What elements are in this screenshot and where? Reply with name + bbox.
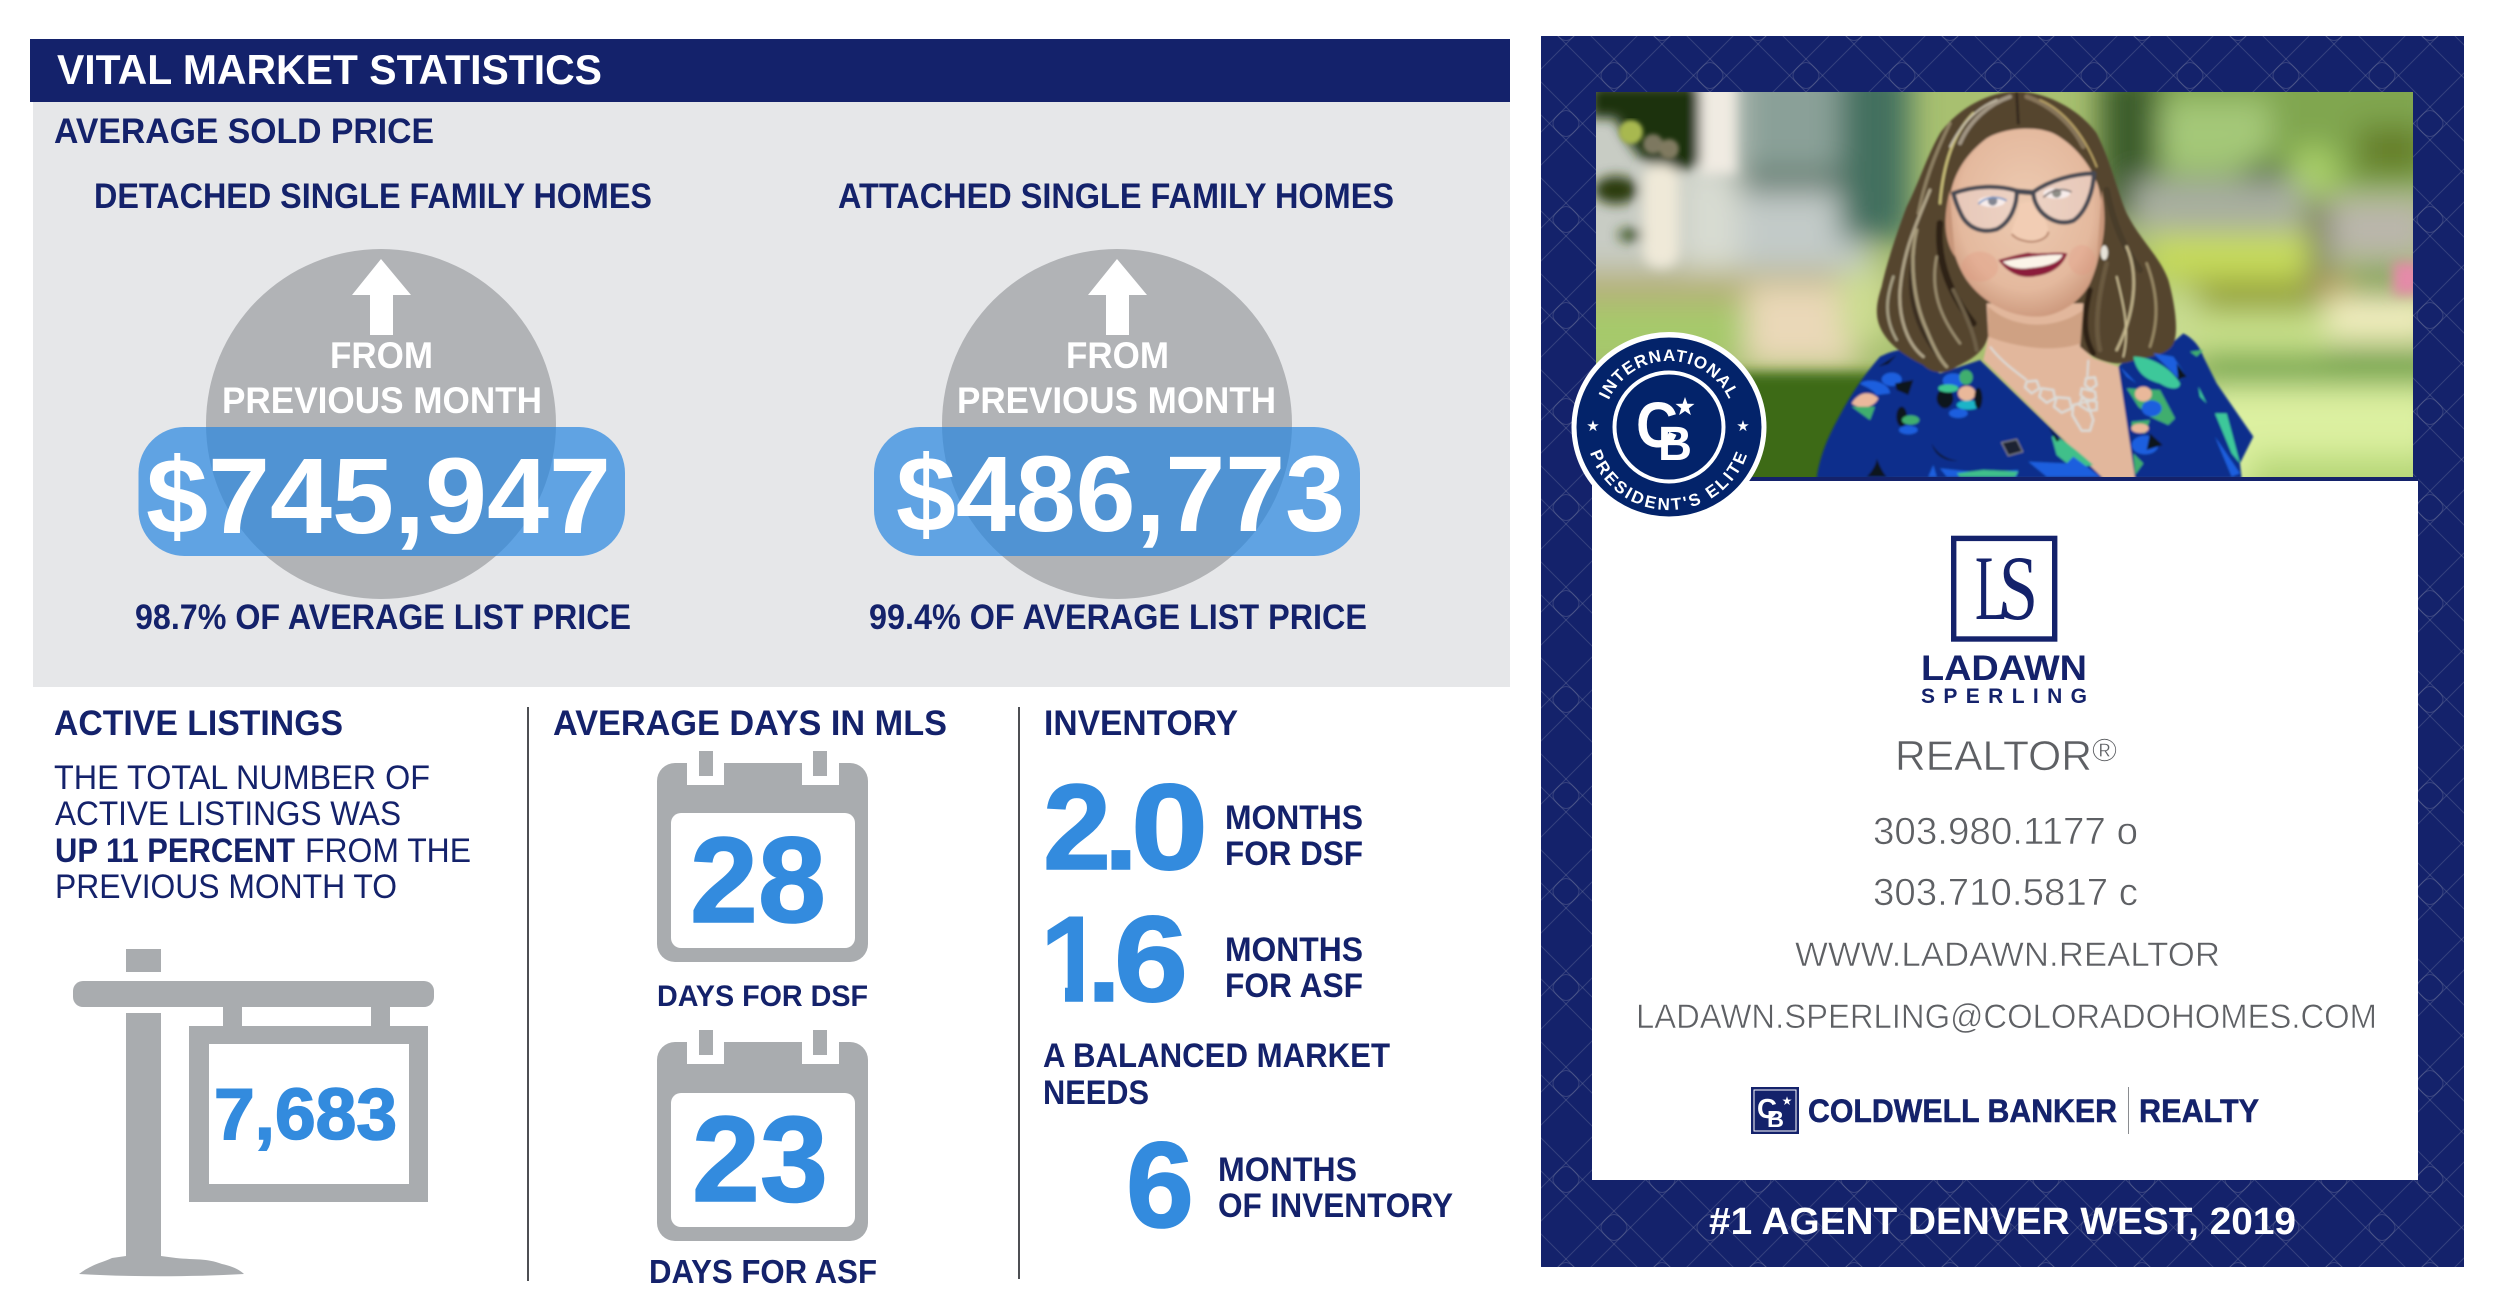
stat: attached homes: 99.4% OF AVERAGE LIST PRICE [869,598,1367,637]
agent title: REALTOR [1895,732,2092,779]
face [1949,129,2102,317]
badge: International President's Elite [1572,332,1766,516]
panel: average sold price [33,102,1510,687]
heading: average sold price: AVERAGE SOLD PRICE [54,112,434,151]
stat: 1.6 months for ASF: 6 [1114,891,1188,1027]
contact details: WWW.LADAWN.REALTOR [1795,936,2220,974]
stat: 2.0 months for DSF: 2 [1043,759,1111,895]
logo: Coldwell Banker Realty: B [1767,1106,1784,1132]
stat: 2.0 months for DSF: MONTHS [1225,799,1363,837]
stat: attached homes: ATTACHED SINGLE FAMILY HOMES [838,177,1394,216]
award banner text: #1 AGENT DENVER WEST, 2019 [1709,1201,2296,1243]
panel: active listings [54,704,471,1276]
text: balanced market: A BALANCED MARKET [1043,1037,1390,1075]
description text: PREVIOUS MONTH TO [55,868,397,906]
stat: 2.0 months for DSF: . [1104,759,1138,895]
panel: active listings: 7,683 [214,1075,397,1155]
panel: average days in MLS [553,704,947,1290]
icon: calendar, 23 days: 23 [692,1091,828,1227]
panel: average days in MLS: AVERAGE DAYS IN MLS [553,704,947,743]
icon: for sale sign [73,949,434,1276]
icon: calendar, 28 days: 28 [690,812,826,948]
agent portrait [1817,92,2253,478]
panel: inventory [1040,704,1453,1253]
agent title: ® [2092,732,2117,768]
section heading bar: VITAL MARKET STATISTICS [57,46,602,93]
stat: attached homes: FROM [1066,335,1169,376]
panel: active listings: ACTIVE LISTINGS [54,704,343,743]
logo: Coldwell Banker Realty: ★ [1782,1094,1792,1108]
stat: attached homes: PREVIOUS MONTH [957,380,1276,421]
eyes [1978,196,2005,207]
stat: detached homes: PREVIOUS MONTH [222,380,542,421]
badge: International President's Elite: ★ [1736,418,1750,435]
contact details: LADAWN.SPERLING@COLORADOHOMES.COM [1636,998,2377,1036]
photo foreground greens [1742,362,1872,477]
contact details [1636,811,2377,1036]
stat: detached homes: $745,947 [146,435,611,556]
stat: detached homes [94,177,652,637]
description text: FROM THE [305,832,471,870]
icon: calendar, 28 days [657,751,868,962]
badge: International President's Elite: B [1658,418,1692,471]
stat: 1.6 months for ASF [1048,915,1362,1003]
stat: 1.6 months for ASF: 1 [1040,891,1108,1027]
contact details: 303.980.1177 o [1873,811,2138,853]
dress [1817,333,2253,478]
badge: International President's Elite: C [1636,389,1678,461]
panel: inventory: INVENTORY [1044,704,1238,743]
agent name [1921,649,2087,708]
glasses [1953,173,2094,231]
earring [2101,245,2108,260]
badge: International President's Elite: ★ [1586,418,1600,435]
neck and chest [1983,303,2135,478]
agent photo [1596,92,2413,477]
panel: average days in MLS: DAYS FOR DSF [657,980,868,1013]
panel: agent card [1541,36,2464,1267]
stat: 1.6 months for ASF: . [1087,891,1121,1027]
stat: 2.0 months for DSF: FOR DSF [1225,835,1363,873]
contact details: 303.710.5817 c [1873,872,2138,914]
stat: 2.0 months for DSF: 0 [1131,759,1208,895]
agent name: SPERLING [1921,685,2087,708]
stat: detached homes: 98.7% OF AVERAGE LIST PRICE [135,598,631,637]
nose [2014,222,2048,240]
logo: Coldwell Banker Realty: C [1757,1093,1777,1124]
description text: THE TOTAL NUMBER OF [54,759,430,797]
hair [1877,92,2176,372]
text: balanced market [1043,1037,1390,1112]
stat: detached homes: FROM [330,335,433,376]
logo: Coldwell Banker Realty: COLDWELL BANKER [1808,1093,2117,1129]
agent name: LADAWN [1921,649,2087,688]
dress flowers [1852,350,2240,477]
icon: calendar, 23 days [657,1030,868,1241]
panel: average days in MLS: DAYS FOR ASF [649,1253,877,1290]
stat: 6 months of inventory: MONTHS [1218,1151,1357,1189]
stat: 6 months of inventory: OF INVENTORY [1218,1187,1453,1225]
photo foliage [1590,80,2423,295]
logo: LS monogram: L [1975,537,2008,639]
stat: attached homes [838,177,1394,637]
stat: attached homes: $486,773 [896,433,1345,554]
stat: 1.6 months for ASF: FOR ASF [1225,967,1363,1005]
text: balanced market: NEEDS [1043,1074,1149,1112]
description text: ACTIVE LISTINGS WAS [55,795,401,833]
logo: Coldwell Banker Realty [1751,1087,2259,1134]
description text [54,759,471,906]
stat: 6 months of inventory [1126,1117,1453,1253]
section heading bar [30,39,1510,102]
stat: 1.6 months for ASF: MONTHS [1225,931,1363,969]
necklace [1990,347,2097,431]
badge: International President's Elite: PRESIDENT'S ELITE [1590,449,1747,510]
stat: detached homes: DETACHED SINGLE FAMILY HOMES [94,177,652,216]
photo background [1596,92,2413,477]
smile [1998,253,2067,277]
stat: 2.0 months for DSF [1043,759,1363,895]
logo: LS monogram: S [1999,537,2038,639]
logo: Coldwell Banker Realty: REALTY [2139,1093,2259,1129]
logo: LS monogram [1954,537,2055,639]
description text: UP 11 PERCENT [55,832,295,870]
badge: International President's Elite: INTERNATIONAL [1598,350,1736,400]
stat: 6 months of inventory: 6 [1126,1117,1194,1253]
